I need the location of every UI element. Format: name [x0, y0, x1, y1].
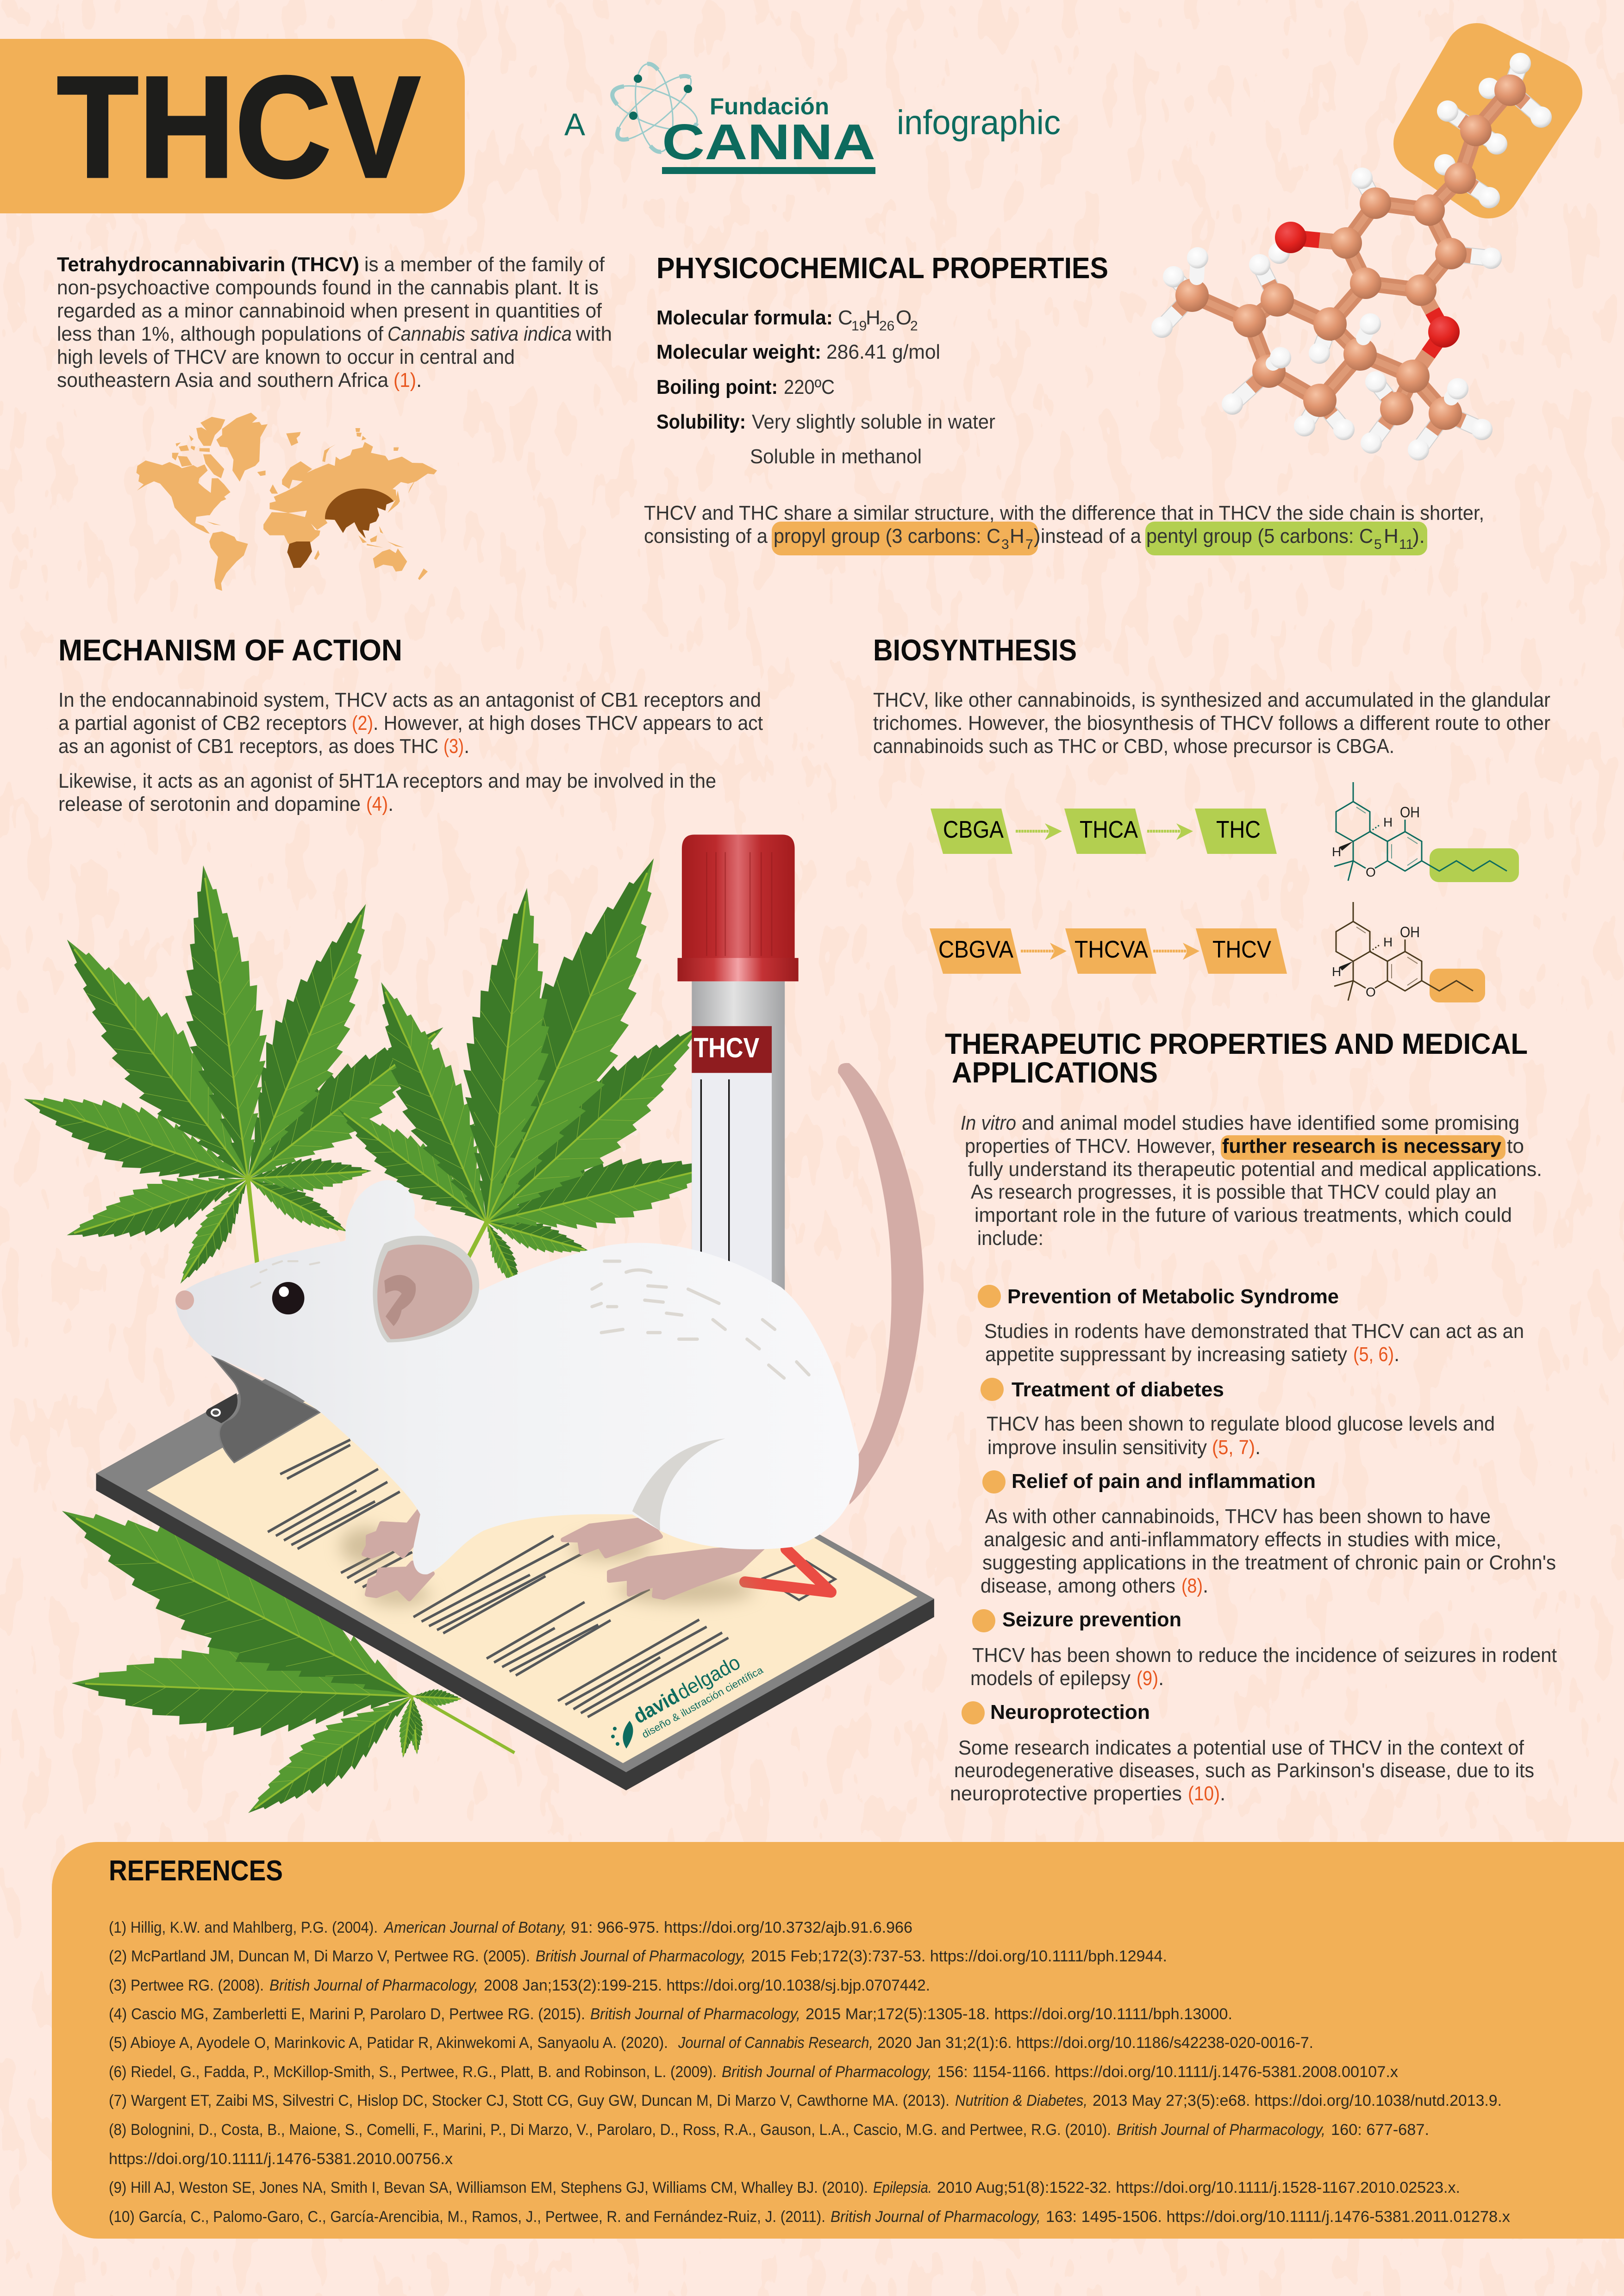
- comparison text: propyl vs pentyl: pentyl group (5 carbons: C: [1146, 525, 1373, 548]
- comparison text: propyl vs pentyl: 7: [1025, 537, 1033, 552]
- item: treatment of diabetes: .: [1255, 1436, 1261, 1459]
- panel: physicochemical properties: Molecular weight:: [656, 341, 821, 363]
- paper: [147, 1324, 918, 1763]
- pathway: CBGA to THC: CBGA: [943, 816, 1004, 843]
- intro text: Tetrahydrocannabivarin (THCV): [57, 253, 359, 276]
- references list: 160: 677-687.: [1331, 2121, 1429, 2139]
- panel: physicochemical properties: O: [896, 306, 912, 329]
- watermark: David Delgado: delgado: [673, 1651, 744, 1704]
- intro text: high levels of THCV are known to occur in central and: [57, 346, 515, 368]
- item: neuroprotection: Some research indicates a potential use of THCV in the context of: [958, 1736, 1524, 1759]
- item: relief of pain and inflammation: disease, among others: [981, 1574, 1175, 1597]
- panel: biosynthesis: THCV, like other cannabinoids, is synthesized and accumulated in the glandular: [873, 689, 1550, 711]
- references list: 2008 Jan;153(2):199-215. https://doi.org/10.1038/sj.bjp.0707442.: [484, 1977, 930, 1994]
- rat tail: [838, 1063, 924, 1505]
- therapeutic properties intro: important role in the future of various treatments, which could: [974, 1204, 1512, 1226]
- pathway: CBGVA to THCV: CBGVA: [938, 936, 1013, 963]
- test tube: [678, 834, 799, 1293]
- references list: (3) Pertwee RG. (2008).: [109, 1977, 264, 1994]
- therapeutic properties intro: and animal model studies have identified some promising: [1022, 1112, 1519, 1134]
- document text lines: [268, 1440, 728, 1717]
- chemical structure: THC: H: [1332, 845, 1341, 859]
- comparison text: propyl vs pentyl: 3: [1001, 537, 1009, 552]
- panel: biosynthesis: BIOSYNTHESIS: [873, 633, 1077, 667]
- item: neuroprotection: [950, 1701, 1534, 1805]
- panel: mechanism of action: (4): [366, 793, 388, 815]
- panel: physicochemical properties: PHYSICOCHEMICAL PROPERTIES: [656, 251, 1108, 285]
- therapeutic properties intro: In vitro: [961, 1112, 1016, 1134]
- item: relief of pain and inflammation: analgesic and anti-inflammatory effects in studies with mice,: [984, 1528, 1501, 1551]
- references list: (7) Wargent ET, Zaibi MS, Silvestri C, Hislop DC, Stocker CJ, Stott CG, Guy GW, Duncan M, Di Marzo V, Cawthorne MA. (2013).: [109, 2092, 949, 2109]
- panel: mechanism of action: Likewise, it acts as an agonist of 5HT1A receptors and may be involved in the: [58, 770, 716, 792]
- arrow: [1016, 823, 1062, 840]
- arrow: [1147, 823, 1193, 840]
- clip: [206, 1355, 320, 1462]
- panel: physicochemical properties: Very slightly soluble in water: [752, 411, 995, 433]
- comparison text: propyl vs pentyl: 5: [1374, 537, 1382, 552]
- item: relief of pain and inflammation: (8): [1181, 1574, 1203, 1597]
- item: relief of pain and inflammation: suggesting applications in the treatment of chronic pain or Crohn's: [982, 1551, 1556, 1574]
- item: neuroprotection: (10): [1188, 1782, 1220, 1805]
- panel: mechanism of action: a partial agonist of CB2 receptors: [58, 712, 347, 734]
- references list: American Journal of Botany,: [383, 1919, 567, 1936]
- cannabis leaf: right: [324, 836, 729, 1297]
- item: treatment of diabetes: (5, 7): [1212, 1436, 1255, 1459]
- title banner: [0, 39, 465, 213]
- pathway: CBGVA to THCV: [930, 928, 1287, 974]
- panel: mechanism of action: (3): [443, 735, 464, 758]
- intro text: regarded as a minor cannabinoid when present in quantities of: [57, 299, 602, 322]
- intro text: southeastern Asia and southern Africa: [57, 369, 389, 392]
- references list: 2010 Aug;51(8):1522-32. https://doi.org/10.1111/j.1528-1167.2010.02523.x.: [937, 2179, 1460, 2196]
- cannabis leaf: left: [14, 859, 462, 1293]
- watermark: David Delgado: [611, 1651, 765, 1748]
- item: seizure prevention: [970, 1608, 1557, 1690]
- panel: mechanism of action: release of serotonin and dopamine: [58, 793, 361, 815]
- comparison text: propyl vs pentyl: H: [1384, 525, 1399, 548]
- panel: physicochemical properties: 286.41 g/mol: [826, 341, 940, 363]
- therapeutic properties intro: further research is necessary: [1222, 1135, 1502, 1157]
- panel: physicochemical properties: H: [866, 306, 881, 329]
- references list: 91: 966-975. https://doi.org/10.3732/ajb.91.6.966: [571, 1919, 912, 1936]
- references list: (4) Cascio MG, Zamberletti E, Marini P, Parolaro D, Pertwee RG. (2015).: [109, 2005, 585, 2023]
- panel: physicochemical properties: 220ºC: [784, 376, 835, 398]
- panel: biosynthesis: [873, 633, 1550, 758]
- check mark: [745, 1549, 835, 1600]
- references list: 2020 Jan 31;2(1):6. https://doi.org/10.1186/s42238-020-0016-7.: [877, 2034, 1313, 2052]
- comparison text: propyl vs pentyl: THCV and THC share a similar structure, with the difference that in THCV the side chain is shorter,: [644, 502, 1484, 524]
- panel: therapeutic properties heading: APPLICATIONS: [952, 1057, 1158, 1089]
- panel: physicochemical properties: Soluble in methanol: [750, 445, 922, 468]
- item: relief of pain and inflammation: As with other cannabinoids, THCV has been shown to have: [985, 1505, 1491, 1528]
- references list: 2013 May 27;3(5):e68. https://doi.org/10.1038/nutd.2013.9.: [1093, 2092, 1502, 2109]
- intro text: Cannabis sativa indica: [387, 323, 572, 345]
- therapeutic properties intro: to: [1507, 1135, 1524, 1157]
- panel: physicochemical properties: Molecular formula:: [656, 306, 833, 329]
- comparison text: propyl vs pentyl: [644, 502, 1484, 555]
- panel: physicochemical properties: 2: [910, 318, 918, 334]
- map highlight: Asia and southern Africa: [287, 489, 394, 568]
- references list: British Journal of Pharmacology,: [722, 2063, 932, 2081]
- rat feet: [340, 1510, 763, 1605]
- item: seizure prevention: THCV has been shown to reduce the incidence of seizures in rodent: [972, 1644, 1557, 1667]
- panel: physicochemical properties: [656, 251, 1108, 468]
- pathway: CBGVA to THCV: THCVA: [1074, 936, 1148, 963]
- comparison text: propyl vs pentyl: consisting of a: [644, 525, 768, 548]
- panel: physicochemical properties: 26: [879, 318, 894, 334]
- comparison text: propyl vs pentyl: H: [1010, 525, 1024, 548]
- item: prevention of metabolic syndrome: Studies in rodents have demonstrated that THCV can act as an: [984, 1320, 1524, 1343]
- logo: A Fundación CANNA infographic: Fundación: [710, 93, 829, 119]
- chemical structure: THCV: H: [1332, 964, 1341, 979]
- references list: (6) Riedel, G., Fadda, P., McKillop-Smith, S., Pertwee, R.G., Platt, B. and Robinson, L. (2009).: [109, 2063, 717, 2081]
- item: neuroprotection: Neuroprotection: [990, 1701, 1150, 1724]
- rat ear: [373, 1236, 479, 1342]
- references list: British Journal of Pharmacology,: [590, 2005, 800, 2023]
- item: treatment of diabetes: improve insulin sensitivity: [987, 1436, 1207, 1459]
- references list: 156: 1154-1166. https://doi.org/10.1111/j.1476-5381.2008.00107.x: [937, 2063, 1398, 2081]
- panel: references: [52, 1842, 1624, 2239]
- rat details: [175, 1236, 809, 1531]
- item: seizure prevention: .: [1158, 1667, 1164, 1690]
- references list: British Journal of Pharmacology,: [269, 1977, 478, 1994]
- item: relief of pain and inflammation: .: [1203, 1574, 1208, 1597]
- pathway: CBGVA to THCV: THCV: [1212, 936, 1271, 963]
- references list: (2) McPartland JM, Duncan M, Di Marzo V, Pertwee RG. (2005).: [109, 1948, 530, 1965]
- tube label: [692, 1026, 772, 1073]
- item: neuroprotection: neuroprotective properties: [950, 1782, 1182, 1805]
- logo: A Fundación CANNA infographic: infographic: [897, 103, 1061, 142]
- intro text: with: [575, 323, 612, 345]
- chemical structure: THCV: OH: [1400, 924, 1420, 940]
- item: relief of pain and inflammation: [981, 1470, 1556, 1597]
- item: seizure prevention: (9): [1137, 1667, 1158, 1690]
- molecule 3D model of THCV: [1151, 53, 1552, 460]
- intro text: is a member of the family of: [364, 253, 605, 276]
- rat eye: [272, 1282, 304, 1314]
- intro text: [57, 253, 612, 392]
- illustration: leaves, test tube, clipboard: [14, 834, 934, 1835]
- test tube: THCV: [693, 1033, 759, 1064]
- item: prevention of metabolic syndrome: Prevention of Metabolic Syndrome: [1007, 1285, 1339, 1308]
- icon: atom orbits: [607, 61, 702, 155]
- item: treatment of diabetes: THCV has been shown to regulate blood glucose levels and: [987, 1412, 1495, 1435]
- references list: 2015 Feb;172(3):737-53. https://doi.org/10.1111/bph.12944.: [751, 1948, 1167, 1965]
- references list: (8) Bolognini, D., Costa, B., Maione, S., Comelli, F., Marini, P., Di Marzo, V., Parolaro, D., Ross, R.A., Gauson, L.A., Cascio, M.G. and Pertwee, R.G. (2010).: [109, 2121, 1111, 2139]
- references list: Epilepsia.: [873, 2179, 932, 2196]
- references list: (1) Hillig, K.W. and Mahlberg, P.G. (2004).: [109, 1919, 378, 1936]
- item: relief of pain and inflammation: Relief of pain and inflammation: [1012, 1470, 1316, 1493]
- panel: mechanism of action: MECHANISM OF ACTION: [58, 633, 402, 667]
- arrow: [1153, 943, 1199, 960]
- panel: biosynthesis: trichomes. However, the biosynthesis of THCV follows a different route to other: [873, 712, 1550, 734]
- panel: therapeutic properties heading: THERAPEUTIC PROPERTIES AND MEDICAL: [945, 1028, 1528, 1060]
- panel: mechanism of action: as an agonist of CB1 receptors, as does THC: [58, 735, 438, 758]
- intro text: .: [416, 369, 422, 392]
- panel: biosynthesis: cannabinoids such as THC or CBD, whose precursor is CBGA.: [873, 735, 1394, 758]
- item: seizure prevention: models of epilepsy: [970, 1667, 1131, 1690]
- panel: physicochemical properties: 19: [851, 318, 867, 334]
- arrow: [1021, 943, 1067, 960]
- references list: British Journal of Pharmacology,: [831, 2208, 1041, 2226]
- item: prevention of metabolic syndrome: appetite suppressant by increasing satiety: [985, 1343, 1347, 1366]
- pathway: CBGA to THC: [931, 809, 1277, 854]
- chemical structure: THC: OH: [1400, 804, 1420, 821]
- rat nose: [175, 1290, 194, 1310]
- chemical structure: THC: [1332, 782, 1519, 882]
- therapeutic properties intro: As research progresses, it is possible that THCV could play an: [971, 1181, 1497, 1203]
- comparison text: propyl vs pentyl: ).: [1412, 525, 1425, 548]
- clipboard: [96, 1301, 934, 1791]
- references list: British Journal of Pharmacology,: [536, 1948, 746, 1965]
- panel: mechanism of action: . However, at high doses THCV appears to act: [373, 712, 763, 734]
- panel: therapeutic properties heading: [945, 1028, 1528, 1089]
- watermark: David Delgado: david: [630, 1685, 683, 1728]
- item: prevention of metabolic syndrome: (5, 6): [1353, 1343, 1394, 1366]
- comparison text: propyl vs pentyl: propyl group (3 carbons: C: [774, 525, 1000, 548]
- panel: mechanism of action: (2): [352, 712, 373, 734]
- intro text: non-psychoactive compounds found in the cannabis plant. It is: [57, 276, 599, 299]
- panel: mechanism of action: [58, 633, 763, 815]
- references list: 163: 1495-1506. https://doi.org/10.1111/j.1476-5381.2011.01278.x: [1046, 2208, 1510, 2226]
- therapeutic properties intro: properties of THCV. However,: [965, 1135, 1216, 1157]
- logo: A Fundación CANNA infographic: A: [564, 107, 586, 142]
- references list: https://doi.org/10.1111/j.1476-5381.2010.00756.x: [109, 2150, 453, 2168]
- chemical structure: THCV: H: [1383, 935, 1393, 949]
- therapeutic properties intro: fully understand its therapeutic potential and medical applications.: [968, 1158, 1542, 1181]
- chemical structure: THCV: O: [1366, 985, 1376, 999]
- watermark: David Delgado: diseño & ilustración científica: [640, 1664, 765, 1740]
- references heading: REFERENCES: [109, 1855, 283, 1887]
- item: prevention of metabolic syndrome: [978, 1285, 1524, 1366]
- molecule backdrop: [1426, 56, 1550, 186]
- pathway: CBGA to THC: THCA: [1080, 816, 1138, 843]
- therapeutic properties intro: include:: [977, 1227, 1043, 1250]
- references list: 2015 Mar;172(5):1305-18. https://doi.org/10.1111/bph.13000.: [806, 2005, 1232, 2023]
- references list: Journal of Cannabis Research,: [678, 2034, 873, 2052]
- item: treatment of diabetes: Treatment of diabetes: [1012, 1378, 1224, 1401]
- panel: mechanism of action: In the endocannabinoid system, THCV acts as an antagonist of CB1 receptors and: [58, 689, 761, 711]
- comparison text: propyl vs pentyl: instead of a: [1041, 525, 1142, 548]
- comparison text: propyl vs pentyl: 11: [1399, 537, 1413, 552]
- panel: mechanism of action: .: [464, 735, 469, 758]
- chemical structure: THCV: [1332, 902, 1485, 1002]
- rat body: [175, 1180, 859, 1574]
- item: seizure prevention: Seizure prevention: [1002, 1608, 1181, 1631]
- logo: A Fundación CANNA infographic: CANNA: [662, 114, 875, 170]
- panel: physicochemical properties: Solubility:: [656, 411, 746, 433]
- panel: physicochemical properties: Boiling point:: [656, 376, 778, 398]
- item: neuroprotection: .: [1220, 1782, 1225, 1805]
- references list: British Journal of Pharmacology,: [1117, 2121, 1325, 2139]
- references list: (10) García, C., Palomo-Garo, C., García-Arencibia, M., Ramos, J., Pertwee, R. and Fernández-Ruiz, J. (2011).: [109, 2208, 825, 2226]
- intro text: (1): [394, 369, 416, 392]
- item: prevention of metabolic syndrome: .: [1394, 1343, 1399, 1366]
- comparison text: propyl vs pentyl: ): [1034, 525, 1041, 548]
- panel: mechanism of action: .: [388, 793, 394, 815]
- chemical structure: THC: H: [1383, 815, 1393, 829]
- intro text: less than 1%, although populations of: [57, 323, 384, 345]
- pathway: CBGA to THC: THC: [1216, 816, 1261, 843]
- cannabis leaf: bottom: [39, 1464, 514, 1835]
- panel: physicochemical properties: C: [838, 306, 853, 329]
- therapeutic properties intro: [961, 1112, 1542, 1250]
- references list: (5) Abioye A, Ayodele O, Marinkovic A, Patidar R, Akinwekomi A, Sanyaolu A. (2020).: [109, 2034, 668, 2052]
- world map: [137, 413, 437, 591]
- item: neuroprotection: neurodegenerative diseases, such as Parkinson's disease, due to its: [954, 1759, 1534, 1782]
- references list: (9) Hill AJ, Weston SE, Jones NA, Smith I, Bevan SA, Williamson EM, Stephens GJ, Williams CM, Whalley BJ. (2010).: [109, 2179, 868, 2196]
- references list: [109, 1919, 1510, 2226]
- tube cap: [682, 834, 795, 959]
- chemical structure: THC: O: [1366, 865, 1376, 879]
- references list: Nutrition & Diabetes,: [955, 2092, 1087, 2109]
- item: treatment of diabetes: [981, 1378, 1495, 1459]
- title text: THCV: [57, 47, 421, 208]
- logo: A Fundación CANNA infographic: [564, 61, 1061, 174]
